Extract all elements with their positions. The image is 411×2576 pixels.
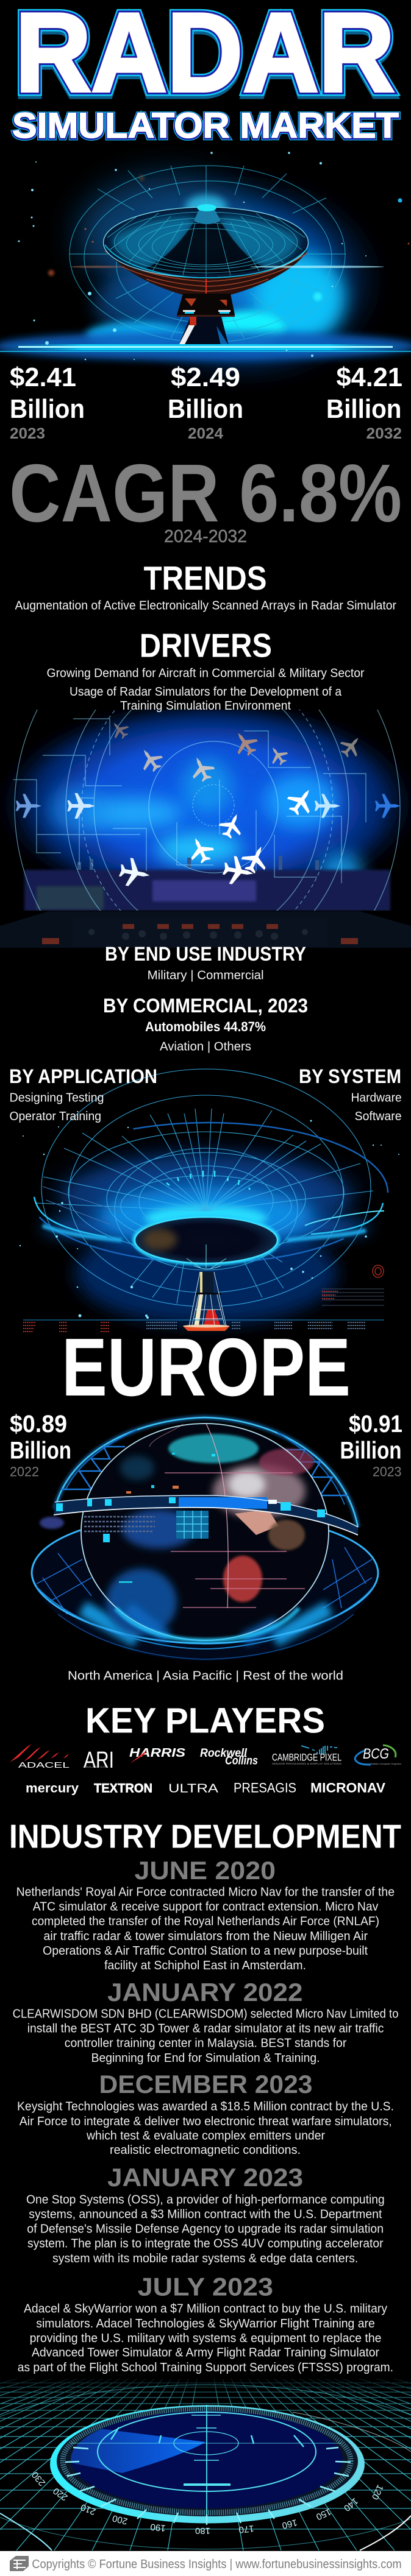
tower (183, 1244, 230, 1331)
data readouts (23, 1289, 384, 1332)
drivers block: Usage of Radar Simulators for the Development of a (70, 685, 342, 699)
development: June 2020: completed the transfer of the Royal Netherlands Air Force (RNLAF) (32, 1915, 379, 1928)
logo: Rockwell Collins (200, 1747, 258, 1768)
development: January 2022: controller training center in Malaysia. BEST stands for (65, 2037, 347, 2050)
development: January 2023: JANUARY 2023 (107, 2163, 303, 2192)
lower dish (32, 1530, 378, 1661)
scope degree labels: 170 (238, 2523, 254, 2535)
development: July 2023: Advanced Tower Simulator & Army Flight Radar Training Simulator (32, 2346, 379, 2360)
development: December 2023: Air Force to integrate & deliver two electronic threat warfare simulators, (20, 2115, 392, 2128)
other regions: North America | Asia Pacific | Rest of the world (68, 1670, 343, 1683)
title: Simulator Market: SIMULATOR MARKET (12, 106, 399, 146)
development: January 2022: Beginning for End for Simulation & Training. (91, 2052, 320, 2065)
dish rim (28, 1123, 388, 1263)
scope degree labels: 200 (112, 2513, 129, 2527)
scope degree labels: 230 (30, 2469, 48, 2488)
logo: Rockwell Collins: Collins (225, 1755, 258, 1768)
logo: ARI: SIMULATION (83, 1765, 107, 1768)
scope rings and crosshair (71, 2405, 341, 2523)
dish reflector (104, 207, 309, 278)
segment: by application (9, 1065, 157, 1123)
CAGR figure: 2024-2032 (164, 527, 247, 546)
stat: 2024 value: 2024 (188, 425, 223, 442)
cockpit console (0, 911, 411, 948)
illustration: air traffic radar screen (0, 710, 411, 948)
title: Simulator Market: SIMULATOR MARKET (12, 107, 399, 146)
footer logo (10, 2556, 29, 2571)
hologram dish wires (37, 1069, 373, 1307)
logos: second row: ULTRA (168, 1782, 219, 1796)
stat: Europe 2022: 2022 (10, 1464, 39, 1480)
scope tick marks (65, 2447, 351, 2525)
development: January 2022: install the BEST ATC 3D Tower & radar simulator at its new air traffic (27, 2022, 384, 2036)
illustration: radar dish hero (0, 152, 411, 387)
logo: Harris: HARRIS (129, 1746, 186, 1760)
logos: second row: PRESAGIS (234, 1780, 296, 1796)
upper dome (55, 1417, 358, 1527)
stat: 2024 value: $2.49 (171, 362, 240, 392)
development: January 2023: system with its mobile radar systems & edge data centers. (52, 2252, 358, 2265)
development: June 2020: air traffic radar & tower simulators from the Nieuw Milligen Air (43, 1930, 368, 1943)
development: January 2022 (13, 1978, 399, 2065)
segment: by commercial: BY COMMERCIAL, 2023 (103, 995, 308, 1017)
development: June 2020: ATC simulator & receive support for contract extension. Micro Nav (33, 1900, 378, 1914)
logos: second row: MICRONAV (310, 1780, 385, 1796)
scope degree labels (30, 2469, 385, 2536)
stat: Europe 2022: $0.89 (10, 1411, 67, 1438)
segment: by application: BY APPLICATION (9, 1065, 157, 1087)
continents (84, 1424, 314, 1640)
scope degree labels: 120 (370, 2483, 385, 2501)
illustration: radar scope on perspective grid (0, 2376, 411, 2550)
segment: by application: Operator Training (10, 1110, 101, 1123)
stat: 2032 value (326, 362, 402, 442)
stat: 2023 value (10, 362, 85, 442)
stat: 2024 value (168, 362, 243, 442)
segment: by system (299, 1065, 402, 1123)
segment: by system: Software (355, 1110, 402, 1123)
stat: Europe 2022 (10, 1411, 71, 1480)
development: December 2023 (17, 2070, 394, 2157)
radar range circles and circuit lines (13, 710, 401, 911)
stat: 2023 value: Billion (10, 394, 85, 424)
stat: 2032 value: $4.21 (337, 362, 402, 392)
stars (18, 152, 410, 360)
drivers block: DRIVERS (140, 627, 272, 665)
trends block: TRENDS (144, 559, 267, 597)
development: December 2023: which test & evaluate complex emitters under (86, 2130, 325, 2143)
logo: Adacel: ADACEL (18, 1760, 70, 1770)
segment: by end use industry: BY END USE INDUSTRY (105, 943, 306, 965)
stat: 2023 value: 2023 (10, 425, 45, 442)
logos: second row: TEXTRON (94, 1782, 152, 1796)
scope degree labels: 150 (315, 2506, 332, 2522)
ring mark (373, 1265, 384, 1277)
segment: by end use industry (105, 943, 306, 983)
development: January 2023: of Defense's Missile Defense Agency to upgrade its radar simulation (27, 2222, 384, 2235)
development: January 2023: system. The plan is to integrate the OSS 4UV computing accelerator (27, 2237, 384, 2251)
development: December 2023: DECEMBER 2023 (99, 2070, 312, 2098)
stat: 2032 value: Billion (326, 394, 401, 424)
logo: BCG: Buffalo Computer Graphics (371, 1762, 401, 1765)
perspective grid (0, 2376, 411, 2550)
dish feed horn (194, 204, 221, 224)
development: January 2023: One Stop Systems (OSS), a provider of high-performance computing (26, 2193, 385, 2207)
development: June 2020: Operations & Air Traffic Control Station to a new purpose-built (43, 1944, 368, 1958)
development: July 2023 (18, 2273, 393, 2374)
development: June 2020 (16, 1856, 395, 1972)
development: July 2023: Adacel & SkyWarrior won a $7 Million contract to buy the U.S. military (24, 2303, 387, 2316)
logo: Harris (129, 1746, 186, 1763)
scope degree labels: 210 (79, 2502, 97, 2517)
logo: Cambridge Pixel (272, 1746, 341, 1765)
segment: by commercial: Automobiles 44.87% (145, 1019, 266, 1034)
title: Simulator Market: SIMULATOR MARKET (12, 107, 399, 146)
sweep wedge (61, 2429, 206, 2473)
scope degree labels: 190 (150, 2521, 166, 2533)
stat: 2023 value: $2.41 (10, 362, 76, 392)
development: December 2023: realistic electromagnetic conditions. (110, 2144, 301, 2157)
stat: Europe 2023: 2023 (373, 1464, 401, 1480)
dish pedestal (177, 294, 235, 345)
development: July 2023: JULY 2023 (138, 2273, 273, 2301)
illustration: radar tower with hologram dish (20, 1069, 399, 1332)
segment: by system: BY SYSTEM (299, 1065, 401, 1087)
footer bar (0, 2551, 411, 2576)
development: July 2023: simulators. Adacel Technologies & SkyWarrior Flight Training are (36, 2317, 375, 2331)
development: June 2020: JUNE 2020 (134, 1856, 276, 1885)
region heading: Europe: EUROPE (62, 1321, 351, 1413)
dish bowl underside (103, 245, 309, 295)
development: June 2020: Netherlands' Royal Air Force contracted Micro Nav for the transfer of the (16, 1886, 395, 1899)
driver text line over image: Training Simulation Environment (120, 699, 291, 713)
stat: Europe 2023: $0.91 (349, 1411, 402, 1438)
logos: second row: mercury (26, 1782, 79, 1796)
stat: Europe 2022: Billion (10, 1438, 71, 1464)
aircraft markers (16, 718, 401, 889)
segment: by commercial (103, 995, 308, 1054)
scope degree labels: 220 (51, 2485, 70, 2503)
drivers block (46, 627, 365, 699)
development: June 2020: facility at Schiphol East in Amsterdam. (104, 1959, 306, 1972)
logo: Rockwell Collins: Rockwell (200, 1747, 248, 1760)
globe sphere (81, 1424, 329, 1640)
city lights (24, 856, 390, 911)
logo: BCG: BCG (363, 1746, 389, 1762)
scope degree labels: 140 (341, 2496, 360, 2513)
segment: by system: Hardware (351, 1092, 402, 1105)
scope degree labels: 180 (195, 2525, 210, 2536)
hologram inner disc (135, 1217, 277, 1263)
drivers block: Growing Demand for Aircraft in Commercial & Military Sector (46, 667, 365, 680)
scope dial (50, 2405, 365, 2523)
development: July 2023: providing the U.S. military with systems & equipment to replace the (30, 2332, 382, 2345)
trends block (15, 559, 396, 613)
scope degree labels: 160 (281, 2517, 298, 2531)
light flecks (166, 1171, 250, 1190)
stat: Europe 2023 (340, 1411, 402, 1480)
illustration: digital globe (32, 1417, 378, 1661)
development: July 2023: as part of the Flight School Training Support Services (FTSSS) program. (18, 2361, 393, 2374)
logo: BCG (355, 1745, 401, 1765)
logos: second row (26, 1780, 385, 1796)
horizon light beam (0, 266, 411, 352)
logo: ARI: ARI (84, 1748, 114, 1773)
trends block: Augmentation of Active Electronically Scanned Arrays in Radar Simulator (15, 599, 396, 613)
equatorial band (40, 1495, 358, 1535)
development: January 2023: systems, announced a $3 Million contract with the U.S. Department (29, 2207, 382, 2221)
stars (20, 1120, 399, 1319)
logo: Adacel (10, 1744, 70, 1770)
segment: by end use industry: Military | Commercial (148, 969, 264, 983)
heading: key players: KEY PLAYERS (85, 1701, 325, 1741)
development: January 2023 (26, 2163, 385, 2265)
segment: by commercial: Aviation | Others (160, 1040, 251, 1054)
logo: Cambridge Pixel: SENSOR PROCESSING & DISPLAY SOLUTIONS (272, 1762, 341, 1765)
development: December 2023: Keysight Technologies was awarded a $18.5 Million contract by the U.S. (17, 2100, 394, 2114)
stat: 2032 value: 2032 (366, 425, 402, 442)
radar rings grid (70, 166, 346, 347)
segment: by application: Designing Testing (10, 1092, 104, 1105)
stat: 2024 value: Billion (168, 394, 243, 424)
development: January 2022: JANUARY 2022 (107, 1978, 302, 2006)
logo: Cambridge Pixel: CAMBRIDGE PIXEL (272, 1752, 341, 1763)
